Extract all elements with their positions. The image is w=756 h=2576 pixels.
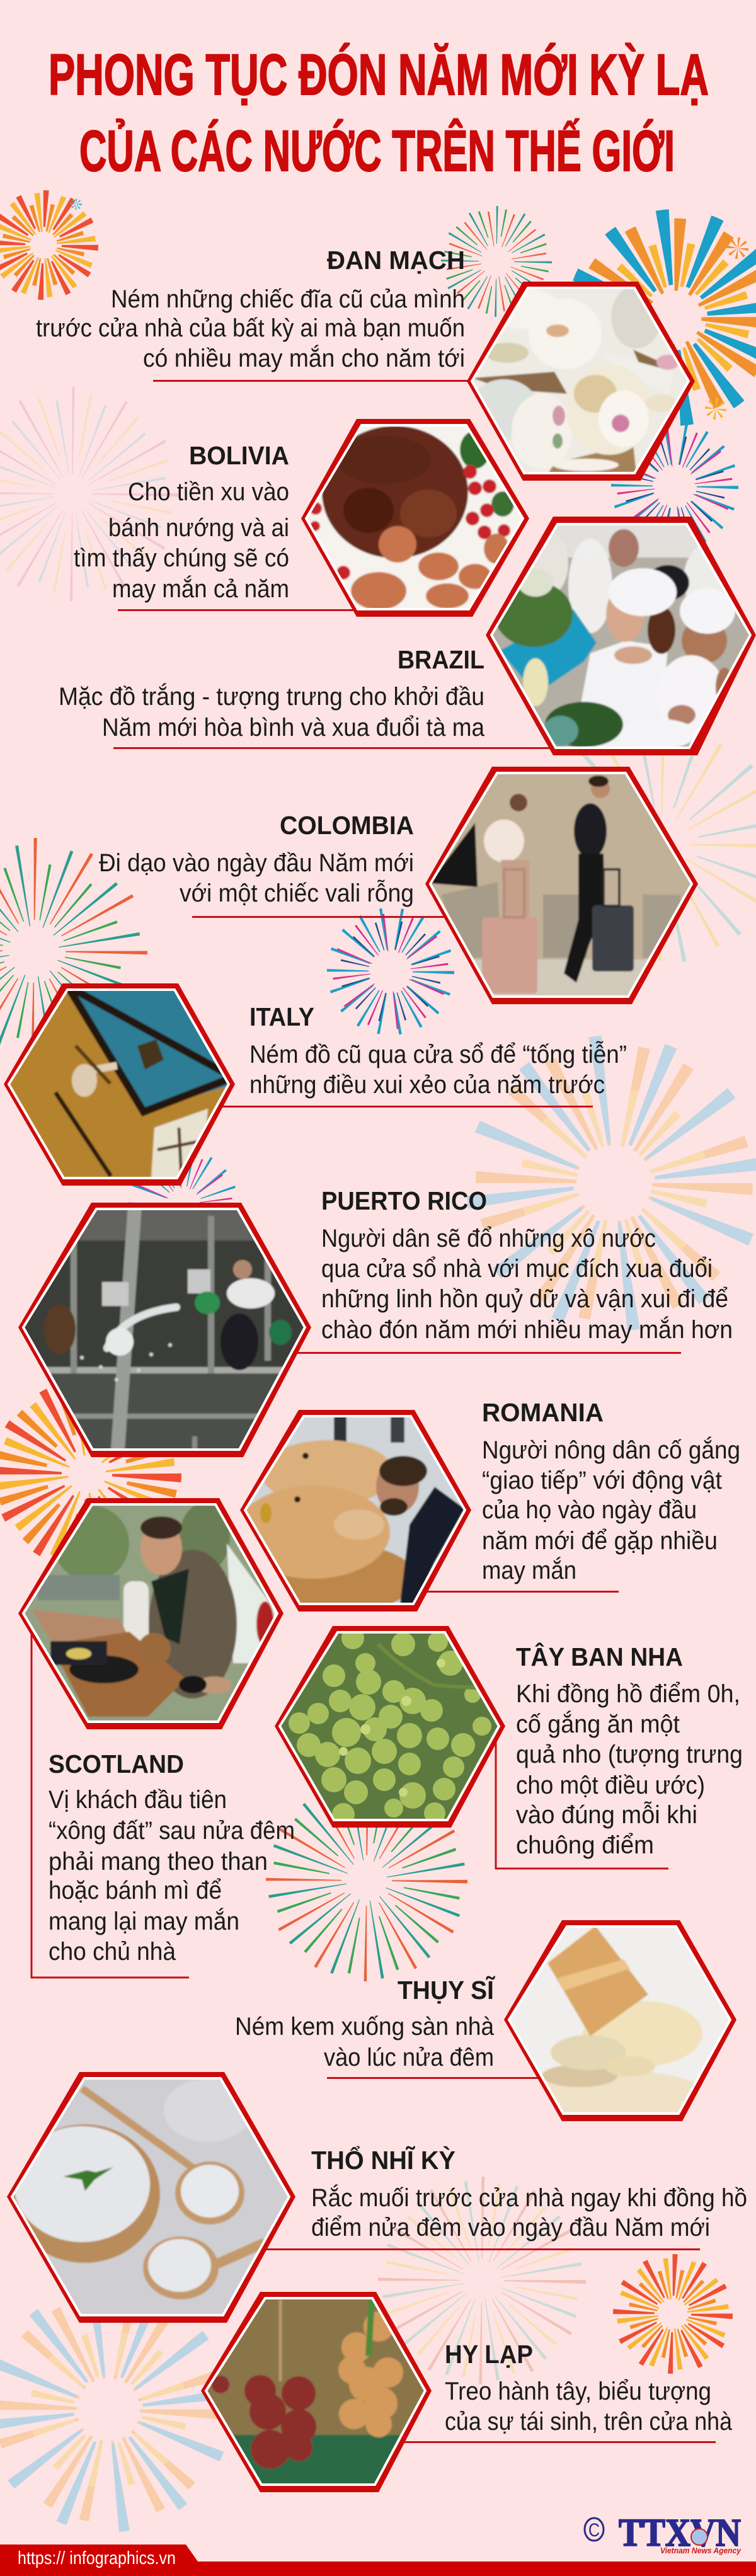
firework: pastel bottom left (30, 2331, 187, 2488)
footer bar: https:// infographics.vn (18, 2548, 176, 2568)
text block: Thổ Nhĩ Kỳ: THỔ NHĨ KỲ (311, 2145, 455, 2175)
hexagon photo: TV thrown from window (4, 983, 237, 1188)
text block: Romania: “giao tiếp” với động vật (482, 1467, 722, 1494)
text block: Brazil: BRAZIL (398, 645, 484, 674)
text block: Bolivia: Cho tiền xu vào (128, 478, 289, 506)
text block: Thổ Nhĩ Kỳ: điểm nửa đêm vào ngày đầu Năm mới (311, 2214, 710, 2241)
text block: Scotland: hoặc bánh mì để (49, 1877, 222, 1904)
hexagon photo: cake and coins (301, 419, 529, 617)
text block: Đan Mạch: Ném những chiếc đĩa cũ của mình (111, 285, 465, 313)
text block: Scotland: phải mang theo than (49, 1848, 268, 1875)
logo: TTXVN: C (588, 2520, 600, 2541)
hexagon photo: broken plates (466, 280, 695, 482)
firework: warm left middle (21, 1408, 153, 1540)
firework: blue and pink right (632, 444, 718, 529)
hexagon photo: people in white (486, 517, 756, 755)
text block: Hy Lạp (401, 2340, 733, 2443)
text block: Colombia: COLOMBIA (280, 811, 414, 840)
text block: Tây Ban Nha: chuông điểm (516, 1831, 654, 1859)
text block: Tây Ban Nha: cố gắng ăn một (516, 1710, 680, 1738)
text block: Thổ Nhĩ Kỳ (265, 2145, 747, 2250)
text block: Bolivia: tìm thấy chúng sẽ có (74, 544, 289, 572)
firework: multicolour left (0, 879, 106, 1024)
text block: Puerto Rico: qua cửa sổ nhà với mục đích xua đuổi (321, 1255, 713, 1283)
text block: Romania: năm mới để gặp nhiều (482, 1527, 718, 1555)
text block: Thụy Sĩ: Ném kem xuống sàn nhà (235, 2013, 495, 2041)
hexagon photo: bowls of salt (7, 2072, 297, 2324)
hexagon photo: hanging onions (201, 2292, 434, 2495)
text block: Romania: Người nông dân cố gắng (482, 1436, 740, 1464)
text block: Puerto Rico: chào đón năm mới nhiều may mắn hơn (321, 1315, 733, 1344)
text block: Hy Lạp: Treo hành tây, biểu tượng (445, 2378, 711, 2405)
text block: Colombia: với một chiếc vali rỗng (180, 879, 414, 907)
firework: warm lower right (634, 2275, 712, 2353)
text block: Romania (422, 1398, 740, 1593)
text block: Thụy Sĩ: vào lúc nửa đêm (324, 2044, 494, 2071)
firework: big pastel right (520, 1089, 709, 1278)
text block: Romania: của họ vào ngày đầu (482, 1496, 697, 1524)
hexagon photo: melted ice cream (504, 1920, 737, 2122)
firework: pale teal and pink lower right (416, 2214, 548, 2347)
text block: Italy (220, 1002, 627, 1108)
text block: Colombia (99, 811, 444, 918)
text block: Scotland: mang lại may mắn (49, 1907, 239, 1935)
firework: pale left (3, 425, 142, 563)
text block: Tây Ban Nha (496, 1642, 743, 1869)
text block: Italy: những điều xui xẻo của năm trước (249, 1071, 605, 1099)
title (49, 42, 709, 183)
firework: small blue under Italy (147, 1168, 220, 1241)
text block: Tây Ban Nha: TÂY BAN NHA (516, 1642, 683, 1671)
text block: Bolivia: BOLIVIA (189, 441, 289, 470)
text block: Scotland (32, 1632, 295, 1978)
text block: Puerto Rico: Người dân sẽ đổ những xô nước (321, 1225, 656, 1252)
text block: Tây Ban Nha: vào đúng mỗi khi (516, 1800, 697, 1829)
text block: Đan Mạch: trước cửa nhà của bất kỳ ai mà bạn muốn (36, 314, 465, 342)
text block: Puerto Rico: những linh hồn quỷ dữ và vận xui đi để (321, 1285, 728, 1313)
text block: Thụy Sĩ: THỤY SĨ (398, 1976, 495, 2005)
hexagon photo: green grapes (275, 1626, 508, 1828)
text block: Tây Ban Nha: cho một điều ước) (516, 1772, 705, 1799)
text block: Brazil: Năm mới hòa bình và xua đuổi tà ma (102, 714, 485, 741)
firework: teal and red beside Dan Mach (457, 222, 536, 301)
firework: blue and pink centre (348, 929, 433, 1014)
text block: Brazil (59, 645, 549, 749)
footer bar (0, 2545, 756, 2576)
text block: Tây Ban Nha: Khi đồng hồ điểm 0h, (516, 1680, 740, 1708)
text block: Bolivia (74, 441, 357, 611)
text block: Brazil: Mặc đồ trắng - tượng trưng cho khởi đầu (59, 682, 484, 711)
hexagon photo: water thrown from window (18, 1203, 311, 1458)
logo: TTXVN: Vietnam News Agency (660, 2546, 742, 2555)
text block: Romania: ROMANIA (482, 1398, 604, 1427)
text block: Đan Mạch (36, 246, 470, 382)
text block: Thụy Sĩ (235, 1976, 541, 2079)
logo: TTXVN: TTXVN (619, 2512, 741, 2555)
firework: pale yellow and teal right of Colombia (583, 765, 740, 923)
text block: Scotland: SCOTLAND (49, 1749, 184, 1778)
hexagon photo: man with coal basket (18, 1498, 286, 1731)
text block: Italy: ITALY (249, 1002, 314, 1031)
text block: Romania: may mắn (482, 1556, 576, 1584)
text block: Scotland: cho chủ nhà (49, 1938, 176, 1966)
text block: Hy Lạp: HY LẠP (445, 2340, 533, 2369)
hexagon photo: empty suitcases (425, 767, 698, 1006)
text block: Đan Mạch: ĐAN MẠCH (327, 246, 465, 275)
text block: Scotland: Vị khách đầu tiên (49, 1786, 227, 1814)
text block: Bolivia: bánh nướng và ai (108, 514, 289, 542)
text block: Italy: Ném đồ cũ qua cửa sổ để “tống tiễn” (249, 1040, 627, 1068)
text block: Colombia: Đi dạo vào ngày đầu Năm mới (99, 849, 414, 877)
text block: Đan Mạch: có nhiều may mắn cho năm tới (143, 344, 465, 372)
text block: Puerto Rico: PUERTO RICO (321, 1186, 487, 1215)
text block: Puerto Rico (296, 1186, 733, 1354)
firework: warm top left (7, 201, 80, 282)
firework: teal and red under Spain (301, 1814, 433, 1947)
text block: Bolivia: may mắn cả năm (112, 575, 289, 603)
text block: Tây Ban Nha: quả nho (tượng trưng (516, 1741, 743, 1768)
hexagon photo: farmer and cows (236, 1410, 473, 1613)
firework: large blue and orange (604, 243, 745, 415)
text block: Scotland: “xông đất” sau nửa đêm (49, 1817, 295, 1845)
